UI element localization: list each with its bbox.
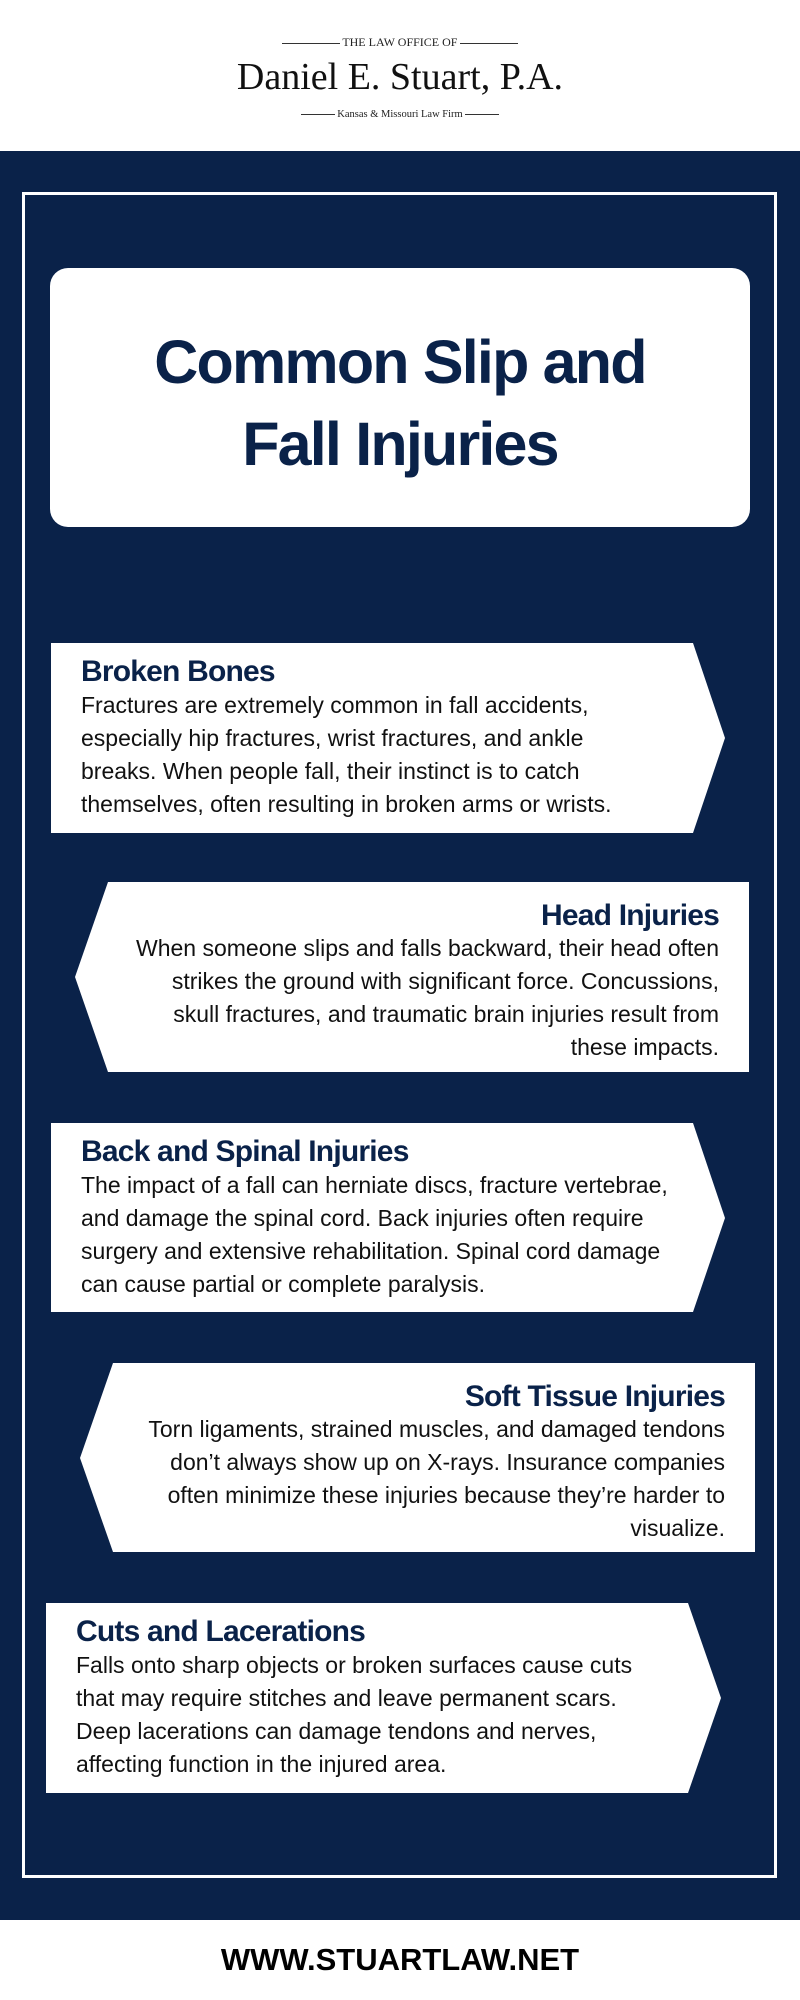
card: broken bones: themselves, often resulting in broken arms or wrists. xyxy=(81,791,611,817)
card: cuts and lacerations: Falls onto sharp objects or broken surfaces cause cuts xyxy=(76,1652,632,1678)
logo top line: THE LAW OFFICE OF xyxy=(342,35,457,49)
card: cuts and lacerations: that may require stitches and leave permanent scars. xyxy=(76,1685,617,1711)
card: head injuries: When someone slips and falls backward, their head often xyxy=(136,935,719,961)
title: Fall Injuries xyxy=(242,410,558,478)
logo name: Daniel E. Stuart, P.A. xyxy=(237,56,563,98)
card: soft tissue: often minimize these injuries because they’re harder to xyxy=(168,1482,725,1508)
card: back and spinal: surgery and extensive rehabilitation. Spinal cord damage xyxy=(81,1238,660,1264)
card: head injuries: strikes the ground with significant force. Concussions, xyxy=(172,968,719,994)
card: back and spinal: can cause partial or complete paralysis. xyxy=(81,1271,485,1297)
card: broken bones: especially hip fractures, wrist fractures, and ankle xyxy=(81,725,583,751)
white frame xyxy=(22,192,777,1878)
card: head injuries: skull fractures, and traumatic brain injuries result from xyxy=(173,1001,719,1027)
card: broken bones: Broken Bones xyxy=(81,655,275,688)
title xyxy=(154,328,646,478)
card: cuts and lacerations xyxy=(46,1603,721,1793)
footer url: WWW.STUARTLAW.NET xyxy=(221,1942,579,1977)
card: cuts and lacerations: Deep lacerations can damage tendons and nerves, xyxy=(76,1718,596,1744)
card: head injuries: these impacts. xyxy=(571,1034,719,1060)
card: back and spinal: and damage the spinal cord. Back injuries often require xyxy=(81,1205,644,1231)
title box xyxy=(50,268,750,527)
card: cuts and lacerations: Cuts and Lacerations xyxy=(76,1615,365,1648)
card: soft tissue: don’t always show up on X-rays. Insurance companies xyxy=(170,1449,725,1475)
card: head injuries: Head Injuries xyxy=(541,899,719,932)
card: soft tissue xyxy=(80,1363,755,1552)
card: broken bones: Fractures are extremely common in fall accidents, xyxy=(81,692,588,718)
card: head injuries xyxy=(75,882,749,1072)
title: Common Slip and xyxy=(154,328,646,396)
card: soft tissue: Torn ligaments, strained muscles, and damaged tendons xyxy=(148,1416,725,1442)
card: broken bones: breaks. When people fall, their instinct is to catch xyxy=(81,758,580,784)
header logo xyxy=(237,35,563,120)
card: cuts and lacerations: affecting function in the injured area. xyxy=(76,1751,446,1777)
card: broken bones xyxy=(51,643,725,833)
card: soft tissue: visualize. xyxy=(630,1515,725,1541)
card: soft tissue: Soft Tissue Injuries xyxy=(465,1380,725,1413)
card: back and spinal xyxy=(51,1123,725,1312)
logo tagline: Kansas & Missouri Law Firm xyxy=(337,109,463,120)
card: back and spinal: Back and Spinal Injuries xyxy=(81,1135,409,1168)
card: back and spinal: The impact of a fall can herniate discs, fracture vertebrae, xyxy=(81,1172,668,1198)
